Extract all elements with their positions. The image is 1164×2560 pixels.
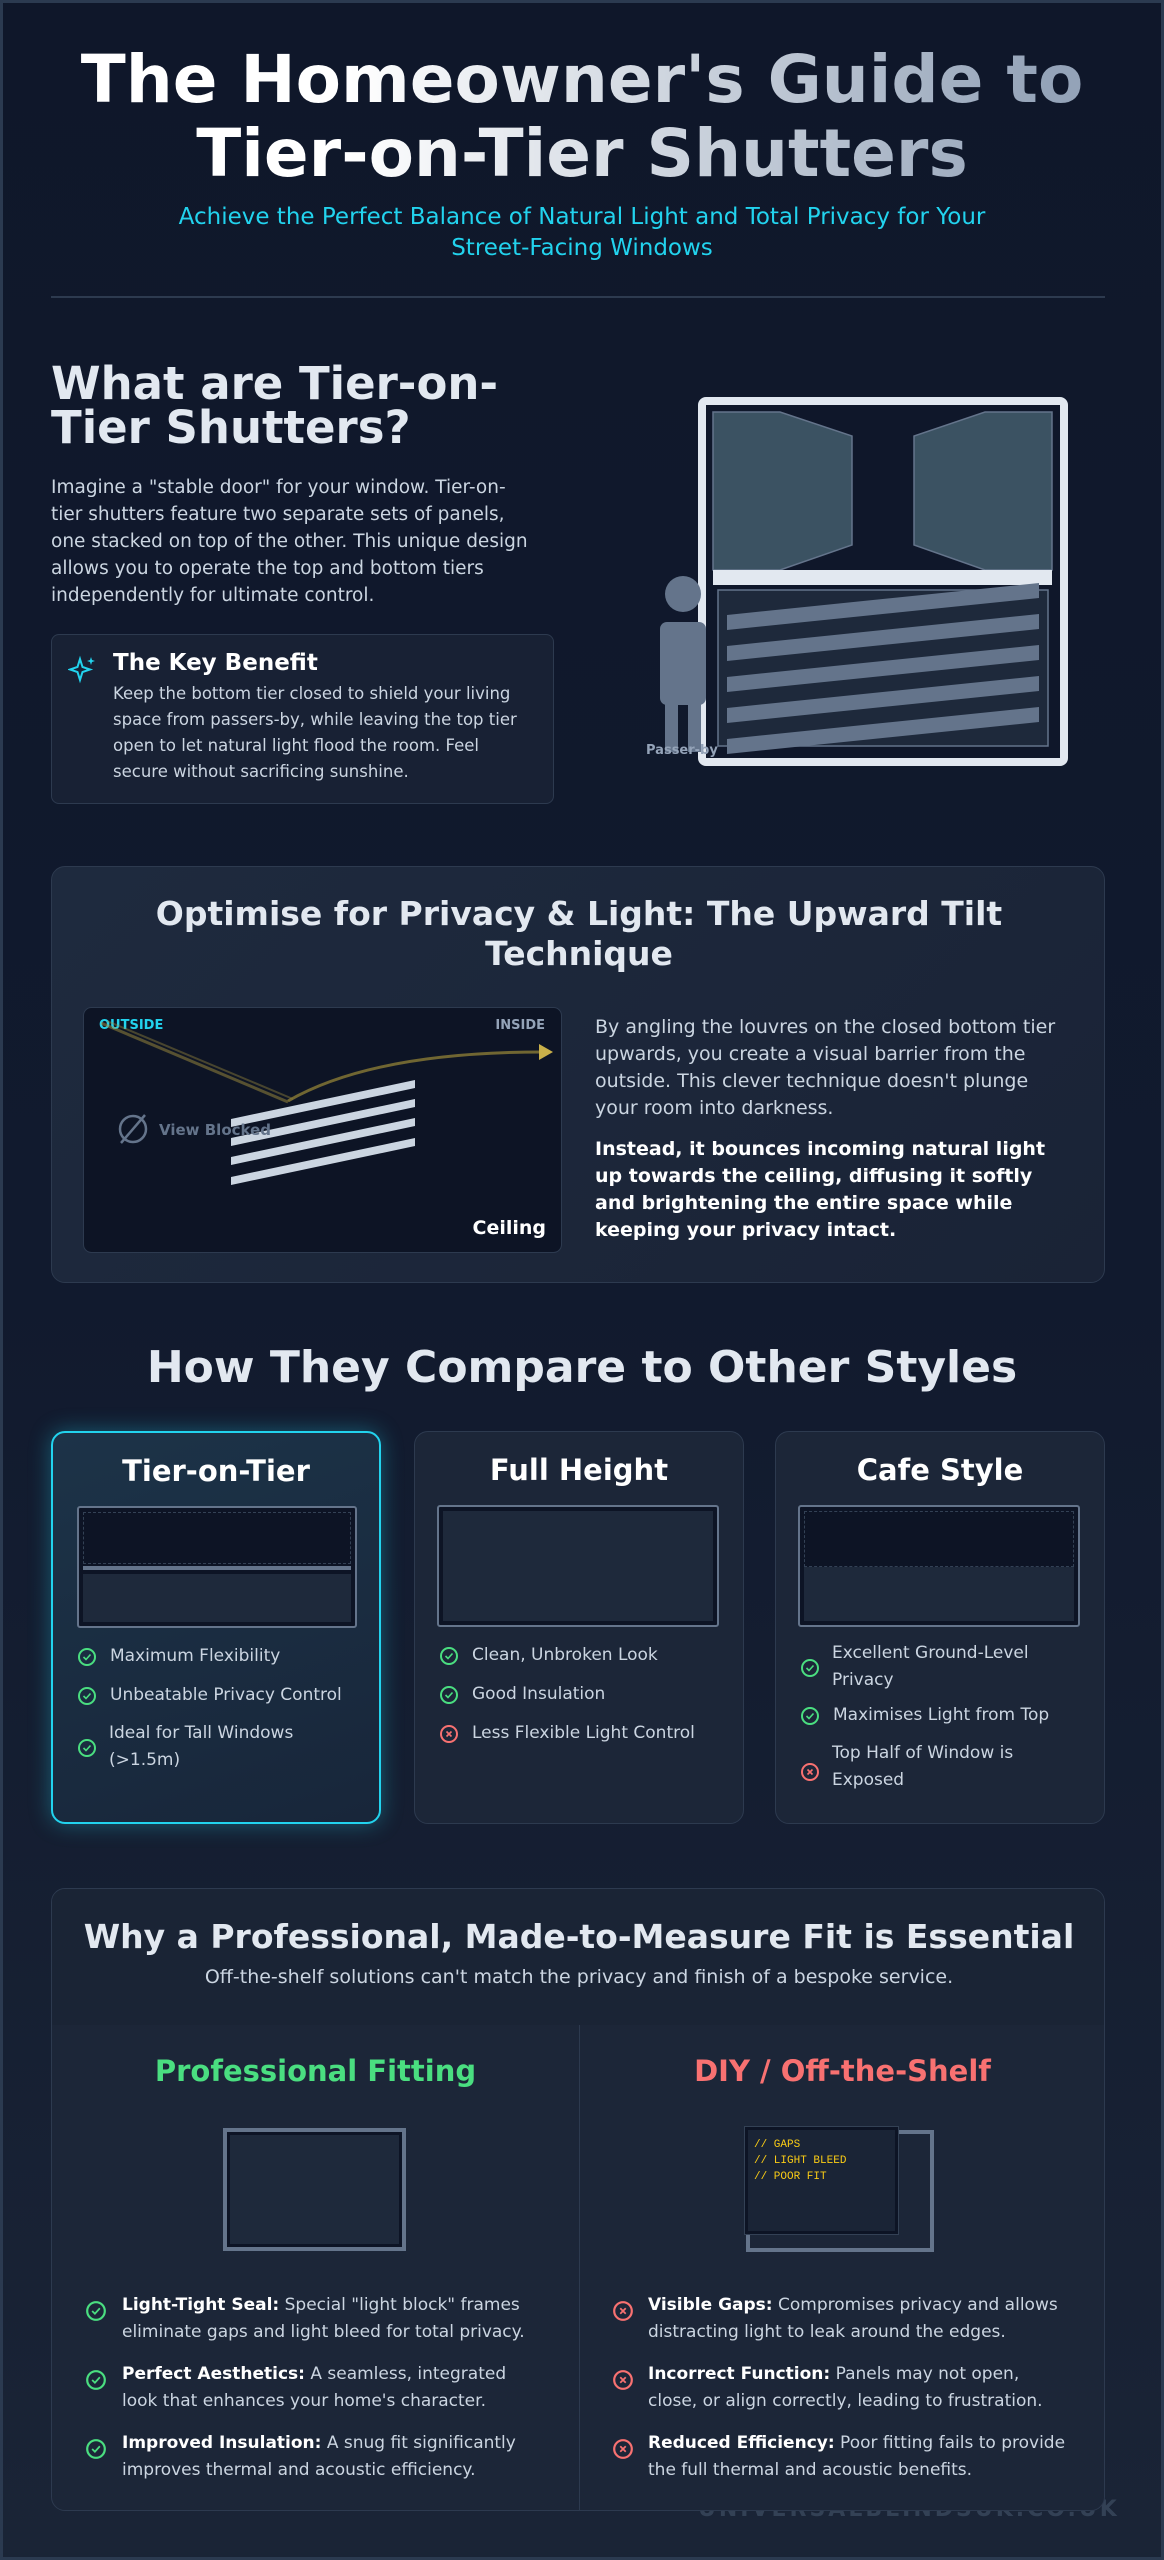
intro paragraph: tier shutters feature two separate sets of panels, xyxy=(51,504,505,525)
subheading: Off-the-shelf solutions can't match the privacy and finish of a bespoke service. xyxy=(205,1966,953,1988)
intro paragraph: one stacked on top of the other. This unique design xyxy=(51,531,528,552)
callout: key benefit xyxy=(51,634,554,804)
section heading: what are xyxy=(51,357,498,454)
heading: compare: How They Compare to Other Styles xyxy=(147,1342,1017,1393)
heading: Optimise for Privacy & Light: The Upward Tilt xyxy=(156,894,1002,933)
diagram: light bounce: Ceiling xyxy=(472,1217,546,1239)
card: full height xyxy=(414,1431,744,1824)
subtitle: Street-Facing Windows xyxy=(451,235,713,261)
subtitle: Achieve the Perfect Balance of Natural Light and Total Privacy for Your xyxy=(179,204,985,230)
text: explanation: By angling the louvres on the closed bottom tier upwards, you create a visual barrier from the outside. This clever technique doesn't plunge your room into darkness. xyxy=(595,1016,1055,1119)
section heading: what are: What are Tier-on- xyxy=(51,357,498,410)
card: tier-on-tier: Ideal for Tall Windows (>1.5m) xyxy=(109,1723,293,1770)
card: tier-on-tier xyxy=(51,1431,381,1824)
column: professional: Light-Tight Seal: Special "light block" frames eliminate gaps and light bleed for total privacy. xyxy=(122,2295,525,2342)
card: tier-on-tier: Unbeatable Privacy Control xyxy=(110,1685,342,1705)
card: cafe style xyxy=(775,1431,1105,1824)
icon: sparkle xyxy=(68,656,95,684)
diagram: light bounce xyxy=(83,1007,562,1253)
icon: misfit window xyxy=(746,2130,934,2252)
list xyxy=(78,1648,96,1666)
intro paragraph: Imagine a "stable door" for your window. Tier-on- xyxy=(51,477,506,498)
card: full height: Less Flexible Light Control xyxy=(472,1723,695,1743)
section heading: what are: Tier Shutters? xyxy=(51,401,411,454)
watermark: UNIVERSALBLINDSUK.CO.UK xyxy=(698,2497,1120,2522)
intro paragraph xyxy=(51,477,528,606)
title xyxy=(0,43,1164,191)
window: tier xyxy=(77,1506,357,1628)
illustration: window with tier shutters and passer-by xyxy=(646,397,1068,766)
column: diy: // GAPS xyxy=(754,2139,800,2151)
card: full height: Full Height xyxy=(490,1453,668,1487)
diagram: light bounce: View Blocked xyxy=(159,1121,271,1139)
title: The Homeowner's Guide to xyxy=(81,41,1083,118)
intro paragraph: allows you to operate the top and bottom tiers xyxy=(51,558,484,579)
column: professional: Professional Fitting xyxy=(155,2054,476,2088)
column: diy: Incorrect Function: Panels may not open, close, or align correctly, leading to frustration. xyxy=(648,2364,1043,2411)
heading: Technique xyxy=(485,934,673,973)
title: Tier-on-Tier Shutters xyxy=(196,115,968,192)
callout title: The Key Benefit xyxy=(113,650,318,676)
column: professional: Perfect Aesthetics: A seamless, integrated look that enhances your home's character. xyxy=(122,2364,506,2411)
card: full height: Good Insulation xyxy=(472,1684,605,1704)
icon: person xyxy=(660,576,706,752)
icon: fitted window xyxy=(223,2128,406,2251)
card: cafe style: Maximises Light from Top xyxy=(833,1705,1049,1725)
column: diy xyxy=(613,2054,1065,2480)
heading: Why a Professional, Made-to-Measure Fit is Essential xyxy=(84,1917,1074,1956)
window: full xyxy=(437,1505,719,1627)
intro paragraph: independently for ultimate control. xyxy=(51,585,374,606)
panel: upward tilt technique xyxy=(51,866,1105,1283)
panel: professional fit xyxy=(51,1888,1105,2511)
card: cafe style: Top Half of Window is Exposed xyxy=(832,1743,1013,1790)
column: professional xyxy=(86,2054,525,2480)
column: diy: // POOR FIT xyxy=(754,2171,827,2183)
column: diy: DIY / Off-the-Shelf xyxy=(694,2054,991,2088)
text: bold explanation: Instead, it bounces incoming natural light up towards the ceiling, diffusing it softly and brightening the entire space while keeping your privacy intact. xyxy=(595,1138,1045,1241)
subtitle xyxy=(178,204,986,261)
column: diy: // LIGHT BLEED xyxy=(754,2155,846,2167)
callout text: Keep the bottom tier closed to shield your living space from passers-by, while leaving the top tier open to let natural light flood the room. Feel secure without sacrificing sunshine. xyxy=(113,684,517,781)
diagram: light bounce: INSIDE xyxy=(495,1018,545,1033)
column: diy: Reduced Efficiency: Poor fitting fails to provide the full thermal and acoustic benefits. xyxy=(648,2433,1065,2480)
illustration: window with tier shutters and passer-by: Passer-by xyxy=(646,743,718,758)
card: cafe style: Cafe Style xyxy=(857,1453,1023,1487)
card: cafe style: Excellent Ground-Level Privacy xyxy=(832,1643,1029,1690)
window: cafe xyxy=(798,1505,1080,1627)
card: full height: Clean, Unbroken Look xyxy=(472,1645,658,1665)
card: tier-on-tier: Maximum Flexibility xyxy=(110,1646,280,1666)
heading xyxy=(156,894,1002,973)
column: diy: Visible Gaps: Compromises privacy and allows distracting light to leak around the edges. xyxy=(648,2295,1058,2342)
card: tier-on-tier: Tier-on-Tier xyxy=(122,1454,310,1488)
diagram: light bounce: OUTSIDE xyxy=(99,1018,163,1033)
column: professional: Improved Insulation: A snug fit significantly improves thermal and acoustic efficiency. xyxy=(122,2433,516,2480)
